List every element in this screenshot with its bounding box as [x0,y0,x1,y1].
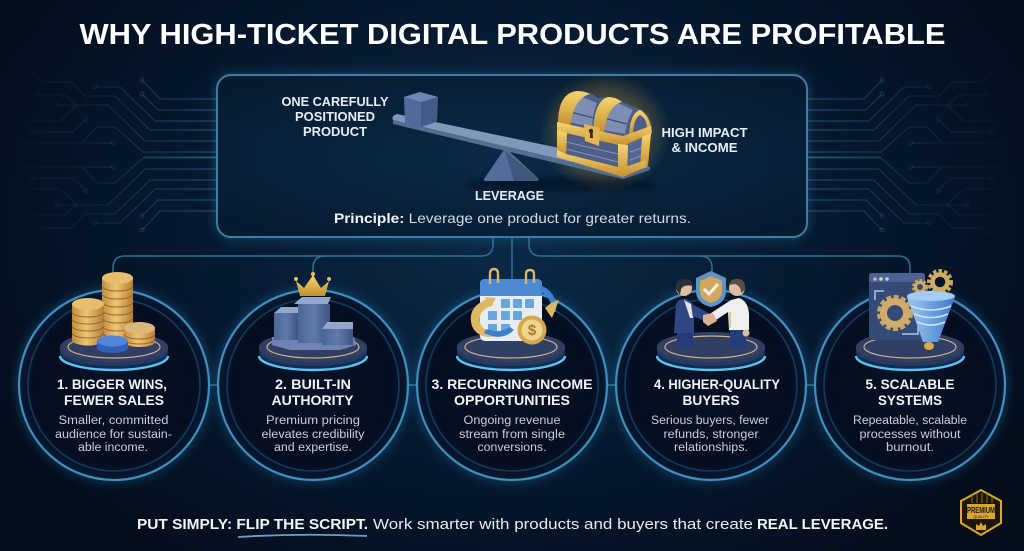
heading: BUYERS [682,392,740,408]
body text [459,415,565,454]
badge: premium quality: QUALITY [974,515,989,519]
body text: Premium pricing [266,415,360,427]
badge: premium quality [961,490,1001,535]
body text: stream from single [459,429,565,441]
connector lines [113,237,910,385]
icon: calendar and coin: $ [528,322,537,339]
heading: 5. SCALABLE [866,376,954,392]
heading [654,376,781,408]
label: leverage: LEVERAGE [475,189,544,203]
heading: 3. RECURRING INCOME [432,376,592,392]
body text [651,415,769,454]
label: one carefully positioned product [282,95,389,139]
panel: built-in authority [217,272,409,481]
body text: Repeatable, scalable [853,415,967,427]
heading: 1. BIGGER WINS, [57,376,167,392]
heading [432,376,592,408]
panel: bigger wins [18,272,210,481]
body text: conversions. [478,442,546,454]
body text: relationships. [674,442,748,454]
label: high impact and income [662,126,748,155]
heading [272,376,354,408]
label: high impact and income: & INCOME [672,141,738,155]
heading: 2. BUILT-IN [275,376,351,392]
badge: premium quality: PREMIUM [967,505,995,515]
circuit pattern right [807,72,1001,238]
panel: principle [217,72,807,237]
body text [55,415,172,454]
icon: calendar and coin [457,269,565,370]
body text: Ongoing revenue [464,415,560,427]
body text: burnout. [886,442,934,454]
panel: scalable systems [814,272,1006,481]
body text: audience for sustain- [55,429,172,441]
footer statement: REAL LEVERAGE. [757,517,888,533]
heading [57,376,167,408]
panel: higher-quality buyers [615,271,807,481]
icon: gears and funnel [856,272,964,370]
body text [853,415,967,454]
body text: Serious buyers, fewer [651,415,769,427]
icon: handshake and shield [657,271,765,370]
body text: elevates credibility [262,429,365,441]
footer statement [137,517,888,537]
circuit pattern left [23,72,217,238]
label: one carefully positioned product: PRODUCT [303,125,367,139]
panel: recurring income [416,269,608,481]
body text: able income. [78,442,148,454]
icon: seesaw with chest [392,72,671,192]
label: one carefully positioned product: POSITIONED [295,110,375,124]
title: WHY HIGH-TICKET DIGITAL PRODUCTS ARE PROFITABLE [80,19,945,51]
body text: and expertise. [274,442,352,454]
footer statement: Work smarter with products and buyers that create [373,517,753,533]
body text [262,415,365,454]
icon: coins [60,272,168,370]
heading: AUTHORITY [272,392,354,408]
heading [866,376,954,408]
label: high impact and income: HIGH IMPACT [662,126,748,140]
body text: refunds, stronger [664,429,759,441]
chest [558,91,652,140]
heading: FEWER SALES [64,392,164,408]
footer statement: PUT SIMPLY: FLIP THE SCRIPT. [137,517,368,533]
body text: Smaller, committed [58,415,168,427]
body text: processes without [860,429,961,441]
heading: OPPORTUNITIES [454,392,570,408]
heading: 4. HIGHER-QUALITY [654,376,781,392]
heading: SYSTEMS [878,392,942,408]
principle text: Principle: Leverage one product for greater returns. [334,210,691,226]
icon: podium and crown [259,272,367,370]
label: one carefully positioned product: ONE CAREFULLY [282,95,389,109]
